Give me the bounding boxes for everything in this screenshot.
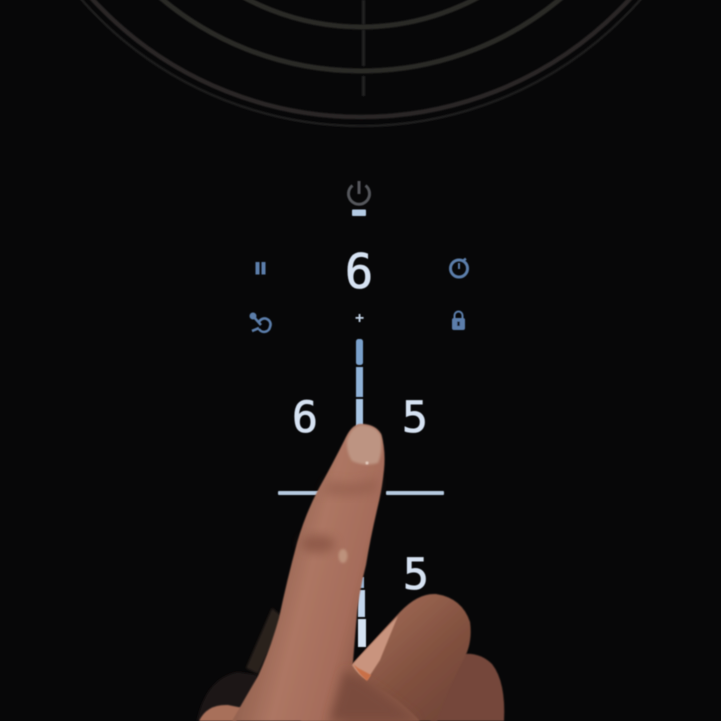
knuckle highlight — [338, 549, 348, 563]
icon: timer — [450, 258, 468, 277]
lower hand shading — [330, 670, 418, 721]
fingernail — [347, 425, 382, 465]
middle fingernail edge — [352, 616, 398, 680]
nail highlight — [366, 462, 368, 464]
digit: right zone 5: 5 — [402, 393, 428, 443]
horizontal divider right — [386, 491, 444, 495]
finger crease — [322, 478, 378, 496]
digit: main level 6: 6 — [345, 245, 373, 300]
horizontal divider left — [278, 491, 328, 495]
knuckle crease — [301, 535, 335, 553]
icon: lock — [452, 312, 465, 330]
upper slider bar — [356, 339, 363, 427]
shadow behind index finger — [246, 608, 284, 674]
digit: left zone 6: 6 — [292, 393, 318, 443]
icon: power button — [348, 181, 370, 204]
fingernail tip — [353, 664, 371, 681]
middle finger — [300, 594, 471, 721]
lower slider bar — [358, 577, 366, 647]
hand — [197, 424, 504, 721]
hob cooking zone rings — [0, 0, 721, 126]
minus indicator — [352, 210, 366, 216]
ring finger — [430, 654, 504, 721]
icon: heat wave — [251, 314, 271, 332]
index finger — [232, 424, 420, 721]
digit: lower zone 5: 5 — [403, 550, 429, 600]
little finger and ring — [197, 672, 258, 721]
icon: pause — [256, 262, 266, 274]
plus indicator: + — [355, 310, 364, 327]
